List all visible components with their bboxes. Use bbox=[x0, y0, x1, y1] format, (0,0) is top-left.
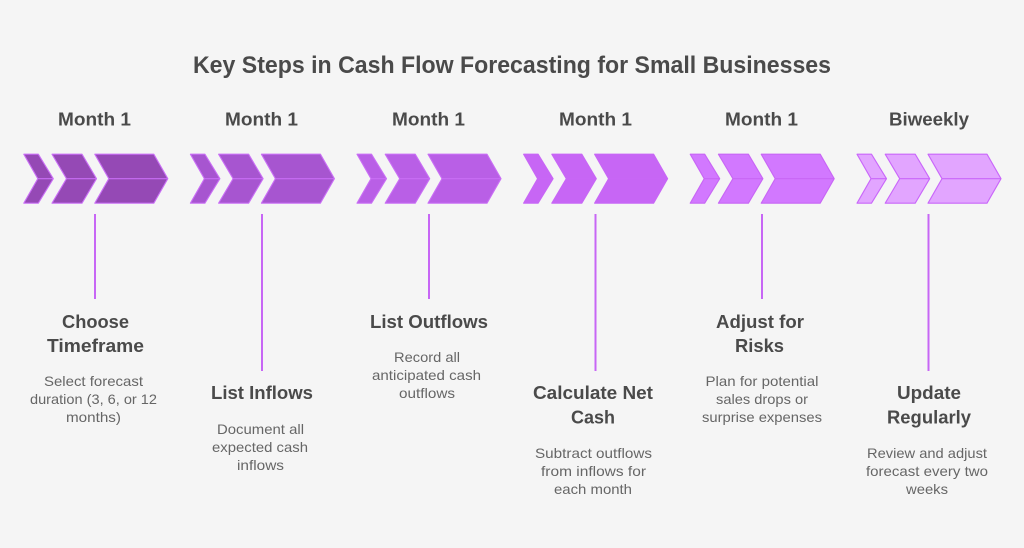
description: list inflows: expected cash bbox=[212, 439, 308, 455]
description: calculate net cash bbox=[535, 445, 652, 497]
heading: calculate net cash bbox=[533, 383, 653, 428]
description: update regularly: forecast every two bbox=[866, 463, 988, 479]
period label: biweekly: Biweekly bbox=[889, 110, 969, 130]
description: choose timeframe: duration (3, 6, or 12 bbox=[30, 391, 157, 407]
heading: choose timeframe: Timeframe bbox=[47, 336, 144, 356]
heading: adjust for risks: Adjust for bbox=[716, 312, 804, 332]
description: list inflows bbox=[212, 421, 308, 473]
connector line 4 bbox=[594, 214, 596, 371]
description: adjust for risks: Plan for potential bbox=[706, 373, 818, 389]
step 6: update regularly bbox=[857, 110, 1001, 497]
description: calculate net cash: from inflows for bbox=[541, 463, 646, 479]
heading: update regularly bbox=[887, 383, 971, 428]
heading: update regularly: Regularly bbox=[887, 408, 971, 428]
description: list outflows bbox=[372, 349, 481, 401]
step 3: list outflows bbox=[357, 110, 501, 401]
icon: triple chevron arrow 5 bbox=[690, 154, 834, 203]
heading: adjust for risks bbox=[716, 312, 804, 356]
period label: month 1: Month 1 bbox=[559, 110, 632, 130]
connector line 5 bbox=[761, 214, 763, 299]
period label: month 1: Month 1 bbox=[392, 110, 465, 130]
description: adjust for risks: surprise expenses bbox=[702, 409, 822, 425]
step 1: choose timeframe bbox=[24, 110, 168, 425]
period label: month 1: Month 1 bbox=[225, 110, 298, 130]
icon: triple chevron arrow 3 bbox=[357, 154, 501, 203]
step 5: adjust for risks bbox=[690, 110, 834, 425]
description: list inflows: inflows bbox=[237, 457, 284, 473]
title: Key Steps in Cash Flow Forecasting for Small Businesses bbox=[193, 52, 831, 79]
description: choose timeframe: Select forecast bbox=[44, 373, 143, 389]
description: list inflows: Document all bbox=[217, 421, 304, 437]
description: choose timeframe bbox=[30, 373, 157, 425]
connector line 1 bbox=[94, 214, 96, 299]
period label: month 1: Month 1 bbox=[725, 110, 798, 130]
heading: list inflows: List Inflows bbox=[211, 383, 313, 403]
step 4: calculate net cash bbox=[524, 110, 668, 497]
heading: adjust for risks: Risks bbox=[735, 336, 784, 356]
step 2: list inflows bbox=[190, 110, 334, 473]
description: list outflows: anticipated cash bbox=[372, 367, 481, 383]
description: update regularly: Review and adjust bbox=[867, 445, 987, 461]
icon: triple chevron arrow 2 bbox=[190, 154, 334, 203]
heading: list outflows: List Outflows bbox=[370, 312, 488, 332]
heading: choose timeframe bbox=[47, 312, 144, 356]
description: update regularly: weeks bbox=[905, 481, 948, 497]
icon: triple chevron arrow 4 bbox=[524, 154, 668, 203]
description: adjust for risks: sales drops or bbox=[716, 391, 808, 407]
period label: month 1: Month 1 bbox=[58, 110, 131, 130]
connector line 3 bbox=[428, 214, 430, 299]
icon: triple chevron arrow 6 bbox=[857, 154, 1001, 203]
description: update regularly bbox=[866, 445, 988, 497]
description: adjust for risks bbox=[702, 373, 822, 425]
heading: calculate net cash: Cash bbox=[571, 408, 615, 428]
connector line 2 bbox=[261, 214, 263, 371]
icon: triple chevron arrow 1 bbox=[24, 154, 168, 203]
description: choose timeframe: months) bbox=[66, 409, 121, 425]
heading: choose timeframe: Choose bbox=[62, 312, 129, 332]
description: calculate net cash: Subtract outflows bbox=[535, 445, 652, 461]
description: calculate net cash: each month bbox=[554, 481, 632, 497]
description: list outflows: Record all bbox=[394, 349, 460, 365]
connector line 6 bbox=[928, 214, 930, 371]
heading: update regularly: Update bbox=[897, 383, 961, 403]
description: list outflows: outflows bbox=[399, 385, 455, 401]
heading: calculate net cash: Calculate Net bbox=[533, 383, 653, 403]
